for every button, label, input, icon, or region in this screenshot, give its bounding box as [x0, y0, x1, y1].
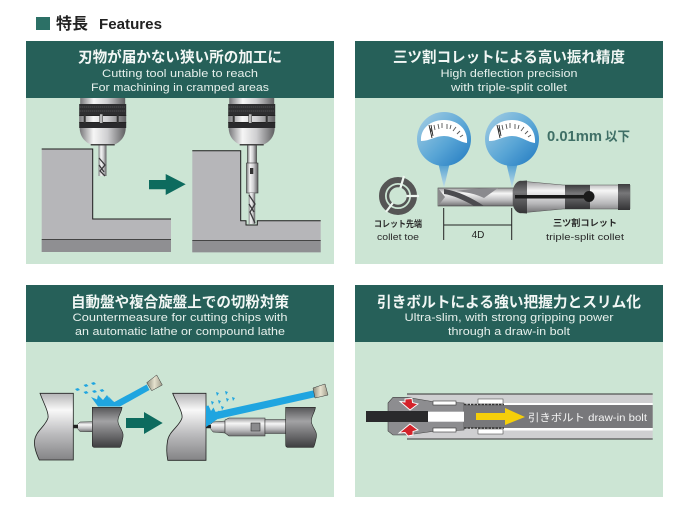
triple-split collet — [513, 180, 630, 214]
collet toe label: コレット先端 — [374, 218, 422, 229]
collet label: 三ツ割コレット — [553, 217, 617, 228]
panel: draw-in bolt — [355, 285, 663, 497]
panel 3 header: Countermeasure for cutting chips with — [72, 312, 288, 324]
title — [36, 14, 162, 33]
gauge 2 — [485, 112, 539, 188]
dimension 4D: 4D — [472, 230, 484, 241]
red arrow: lower grip — [399, 424, 418, 436]
gauge 1 — [417, 112, 471, 188]
panel 1 illustration: before — [42, 98, 171, 252]
lathe: before — [34, 375, 162, 460]
panel 3 header: 自動盤や複合旋盤上での切粉対策 — [71, 293, 289, 311]
end mill — [438, 188, 514, 206]
title: 特長 — [56, 14, 88, 33]
panel 3 header: an automatic lathe or compound lathe — [75, 326, 285, 338]
panel 4 header — [355, 285, 663, 342]
collet toe label: collet toe — [377, 232, 419, 242]
panel: cramped areas — [26, 41, 334, 264]
runout value: 以下 — [605, 129, 630, 144]
panel 1 header: 刃物が届かない狭い所の加工に — [78, 48, 282, 66]
collet label: triple-split collet — [546, 232, 625, 242]
panel 4 header: 引きボルトによる強い把握力とスリム化 — [377, 294, 641, 311]
collet toe label — [374, 218, 422, 242]
title: Features — [99, 16, 162, 33]
draw-in bolt cross-section — [366, 394, 653, 439]
panel 2 header: High deflection precision — [440, 68, 578, 80]
panel 1 header: For machining in cramped areas — [91, 82, 270, 94]
panel 1 illustration: after — [192, 98, 321, 252]
dimension 4D — [444, 208, 512, 241]
panel: cutting chips — [26, 285, 334, 497]
collet toe icon — [382, 176, 419, 212]
panel 3 header — [26, 285, 334, 342]
lathe: after — [167, 384, 328, 460]
panel 1 header — [26, 41, 334, 98]
panel 4 header: Ultra-slim, with strong gripping power — [404, 312, 614, 324]
runout value — [547, 128, 630, 145]
red arrow: upper grip — [400, 398, 418, 410]
panel 1 arrow — [149, 174, 186, 195]
panel 2 header: with triple-split collet — [450, 82, 567, 94]
yellow arrow — [476, 408, 525, 425]
panel 3 arrow — [126, 412, 163, 434]
panel: deflection precision — [355, 41, 663, 264]
panel 2 header — [355, 41, 663, 98]
panel 4 header: through a draw-in bolt — [448, 326, 570, 338]
runout value: 0.01mm — [547, 128, 602, 145]
panel 2 header: 三ツ割コレットによる高い振れ精度 — [393, 48, 625, 66]
panel 1 header: Cutting tool unable to reach — [102, 68, 258, 80]
bolt label: 引きボルト draw-in bolt — [528, 411, 647, 424]
collet label — [546, 217, 625, 242]
